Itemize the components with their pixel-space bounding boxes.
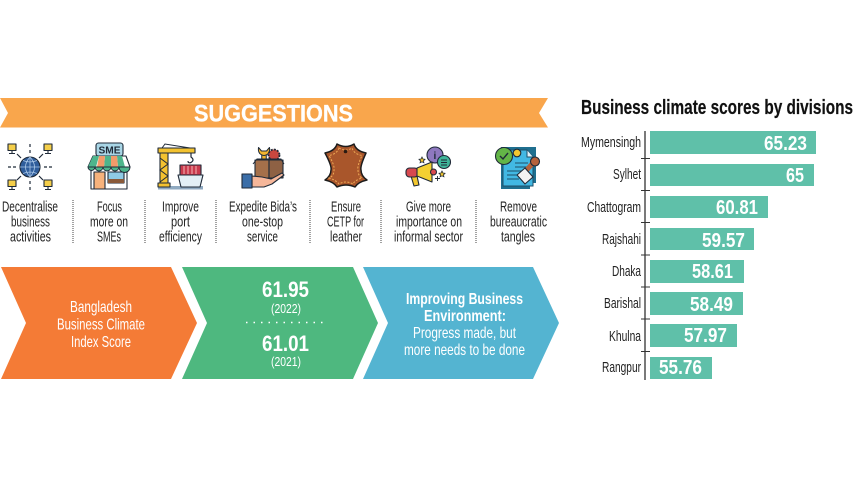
text: CETP for leather: Ensure (331, 200, 361, 216)
arrow: improving business environment: Progress made, but (413, 325, 516, 342)
icon: megaphone with bubbles (406, 147, 450, 186)
bar: Rajshahi: 59.57 (702, 229, 745, 252)
bar: Rajshahi: Rajshahi (602, 232, 641, 248)
bar: Mymensingh: 65.23 (764, 132, 807, 155)
year 2022: (2022) (271, 301, 301, 316)
bar: Khulna: 57.97 (684, 324, 727, 347)
text: CETP for leather: leather (330, 230, 362, 246)
arrow: index score label: Index Score (71, 334, 131, 351)
text: decentralise (2, 200, 58, 246)
bar: Barishal: 58.49 (690, 293, 733, 316)
bar: Dhaka: 58.61 (692, 260, 733, 283)
bar: Dhaka (612, 260, 744, 283)
bar chart: divisions (581, 131, 816, 380)
text: focus on SMEs: more on (90, 214, 128, 230)
bar: Sylhet: Sylhet (613, 167, 641, 183)
text: decentralise: business (11, 214, 50, 230)
text: expedite one-stop service (229, 200, 297, 246)
heading: suggestions: SUGGESTIONS (194, 100, 353, 128)
text: informal sector: informal sector (394, 230, 463, 246)
bar: Rangpur: 55.76 (659, 356, 702, 379)
score 2021: 61.01 (262, 331, 309, 356)
text: port efficiency (159, 200, 203, 246)
icon: SME shop (88, 143, 130, 189)
bar: Chattogram: Chattogram (587, 200, 641, 216)
text: CETP for leather (327, 200, 364, 246)
text: informal sector: importance on (396, 214, 462, 230)
text: CETP for leather: CETP for (327, 214, 364, 230)
text: decentralise: Decentralise (2, 200, 58, 216)
text: decentralise: activities (10, 230, 51, 246)
bar: Mymensingh: Mymensingh (581, 135, 641, 151)
banner: suggestions (0, 98, 548, 128)
icon: SME shop: SME (98, 146, 121, 156)
bar: Rajshahi (602, 228, 754, 252)
bar: Barishal: Barishal (604, 296, 641, 312)
text: focus on SMEs (90, 200, 128, 246)
text: focus on SMEs: Focus (97, 200, 122, 216)
text: bureaucratic tangles (490, 200, 547, 246)
arrow: index score label (1, 267, 197, 379)
arrow: improving business environment: Improving Business (406, 291, 523, 308)
bar: Barishal (604, 292, 743, 316)
suggestions row (2, 143, 547, 246)
bar: Khulna: Khulna (609, 329, 642, 345)
arrow: index scores (182, 267, 378, 379)
bar: Khulna (609, 324, 737, 347)
icon: leather hide (325, 144, 367, 187)
text: focus on SMEs: SMEs (97, 230, 121, 246)
icon: hand holding boxes (242, 148, 284, 188)
text: informal sector: Give more (406, 200, 451, 216)
icon: megaphone with bubbles: i (434, 151, 436, 162)
text: port efficiency: efficiency (159, 230, 203, 246)
text: port efficiency: port (171, 214, 190, 230)
score 2022: 61.95 (262, 277, 309, 302)
arrow: improving business environment: more needs to be done (404, 342, 525, 359)
text: expedite one-stop service: one-stop (242, 214, 283, 230)
icon: document and stamp (496, 147, 540, 189)
text: bureaucratic tangles: tangles (501, 230, 535, 246)
bar: Dhaka: Dhaka (612, 264, 642, 280)
bar: Rangpur (602, 356, 712, 379)
arrow: improving business environment: Environment: (424, 308, 506, 325)
bar: Mymensingh (581, 131, 816, 155)
text: port efficiency: Improve (162, 200, 199, 216)
bar: Sylhet: 65 (786, 164, 804, 187)
arrow: index score label: Bangladesh (70, 299, 132, 316)
bar: Rangpur: Rangpur (602, 360, 641, 376)
year 2021: (2021) (271, 354, 301, 369)
icon: decentralised network (8, 144, 52, 190)
text: bureaucratic tangles: Remove (500, 200, 537, 216)
icon: port crane and ship (158, 144, 203, 190)
text: expedite one-stop service: service (247, 230, 278, 246)
bar: Chattogram (587, 196, 768, 219)
text: informal sector (394, 200, 463, 246)
bar: Chattogram: 60.81 (716, 196, 758, 219)
text: bureaucratic tangles: bureaucratic (490, 214, 547, 230)
arrow: index score label: Business Climate (57, 316, 145, 334)
text: expedite one-stop service: Expedite Bida’s (229, 200, 297, 216)
arrow: improving business environment (363, 267, 559, 379)
bar: Sylhet (613, 164, 814, 187)
